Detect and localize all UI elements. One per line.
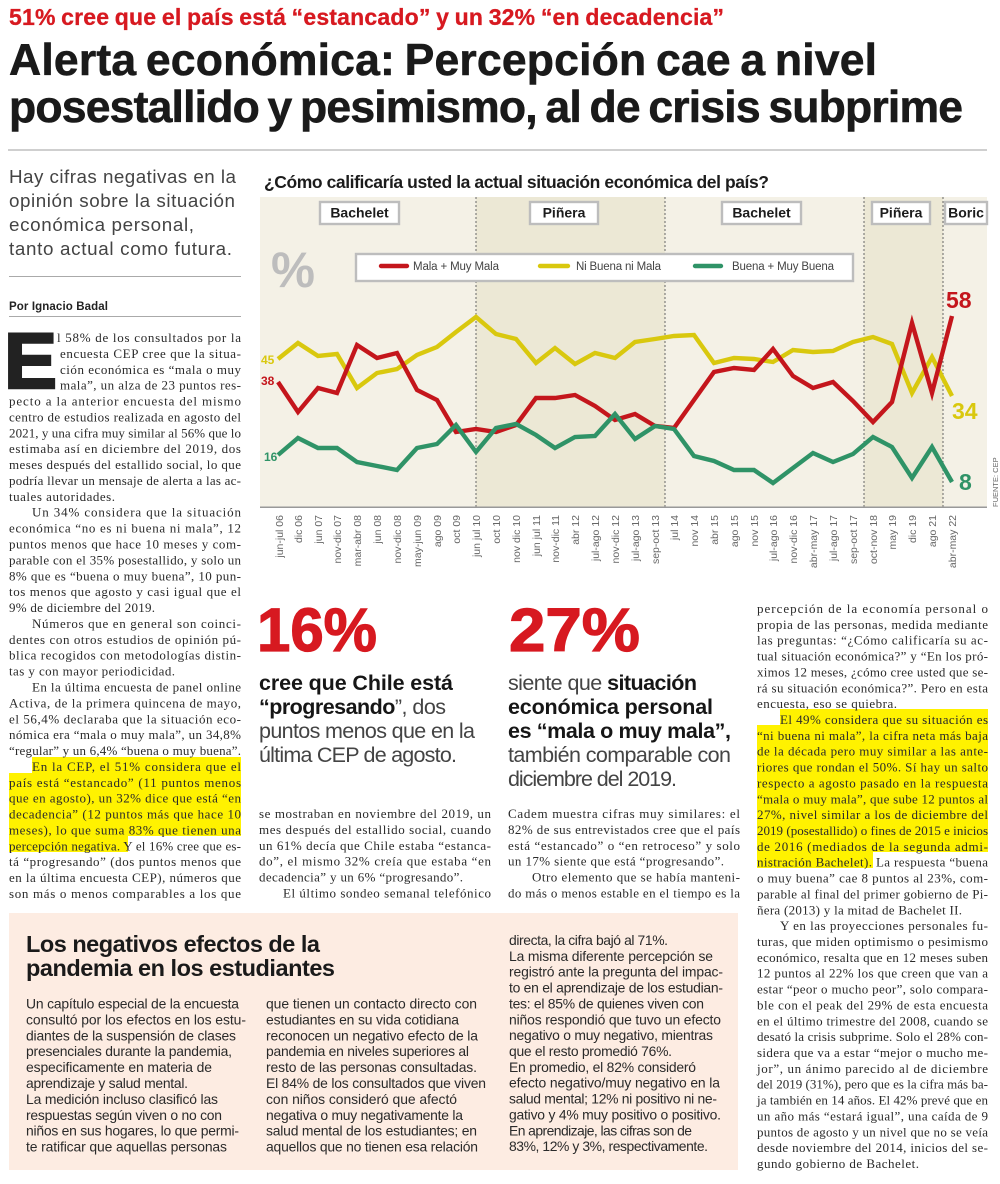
byline: Por Ignacio Badal bbox=[9, 301, 108, 313]
period label: Bachelet second term bbox=[722, 202, 801, 224]
x axis labels: nov-dic 11 bbox=[550, 515, 562, 563]
stat callout: 27%: es “mala o muy mala”, bbox=[508, 719, 731, 743]
article column four: ble con el peak del 29% de esta encuesta bbox=[757, 997, 988, 1012]
panel heading: pandemia en los estudiantes bbox=[26, 955, 335, 981]
panel text column three: salud mental; 12% ni positivo ni ne- bbox=[509, 1091, 717, 1107]
article column four: percepción de la economía personal o bbox=[757, 601, 988, 616]
x axis labels: ago 21 bbox=[927, 515, 939, 547]
x axis labels: jul-ago 13 bbox=[630, 515, 642, 562]
line chart bbox=[260, 197, 1000, 568]
x axis labels: sep-oct 17 bbox=[848, 515, 860, 564]
article column one: en la última encuesta CEP), números que bbox=[9, 870, 241, 885]
x axis labels: nov 14 bbox=[689, 515, 701, 547]
panel text column two: que tienen un contacto directo con bbox=[266, 996, 477, 1012]
x axis labels: oct 10 bbox=[491, 515, 503, 544]
article column four: o muy buena” cae 8 puntos al 23%, com- bbox=[757, 871, 988, 886]
article column one: 9% de diciembre del 2019. bbox=[9, 600, 155, 615]
period label: Bachelet second term: Bachelet bbox=[732, 204, 791, 220]
article column one: podría llevar un mensaje de alerta a las ac- bbox=[9, 473, 241, 488]
panel text column two: aquellos que no tienen esa relación bbox=[266, 1139, 478, 1155]
percent sign: % bbox=[271, 242, 315, 298]
article column four: 2019 (posestallido) o fines de 2015 e inicios bbox=[757, 823, 988, 838]
article column one bbox=[9, 330, 242, 901]
article column one: “regular” y un 6,4% “buena o muy buena”. bbox=[9, 743, 241, 758]
deck text: tanto actual como futura. bbox=[9, 238, 232, 259]
deck text: económica personal, bbox=[9, 214, 194, 235]
x axis labels: jul 14 bbox=[669, 515, 681, 541]
panel text column three: En promedio, el 82% consideró bbox=[509, 1059, 696, 1075]
article column two bbox=[259, 806, 492, 900]
article column four: sidera que va a estar “mejor o mucho me- bbox=[757, 1045, 988, 1060]
period label: Piñera bbox=[530, 202, 598, 224]
panel text column three: negativo o muy negativo, mientras bbox=[509, 1027, 713, 1043]
panel text column two: reconocen un negativo efecto de la bbox=[266, 1027, 478, 1043]
panel text column three: directa, la cifra bajó al 71%. bbox=[509, 932, 668, 948]
x axis labels: abr 12 bbox=[570, 515, 582, 545]
deck text: Hay cifras negativas en la bbox=[9, 166, 237, 187]
article column one: estimaba así en diciembre del 2019, dos bbox=[9, 441, 241, 456]
article column four: de la década pero muy similar a las ante- bbox=[757, 744, 988, 759]
start value labels: 38 bbox=[261, 374, 275, 388]
panel text column three: que el resto promedió 76%. bbox=[509, 1043, 672, 1059]
stat callout: 27% bbox=[508, 596, 731, 791]
article column four: ja también en 14 años. El 42% prevé que en bbox=[756, 1093, 988, 1108]
article column one: dentes con otros estudios de opinión pú- bbox=[9, 632, 241, 647]
article column one: 2021, y una cifra muy similar al 56% que lo bbox=[9, 425, 241, 440]
panel text column three: efecto negativo/muy negativo en la bbox=[509, 1075, 720, 1091]
panel: pandemic effects on students bbox=[9, 913, 738, 1170]
article column one: son más o menos comparables a los que bbox=[9, 886, 241, 901]
series: Buena + Muy Buena bbox=[278, 414, 952, 483]
article column one: meses), lo que suma 83% que tienen una bbox=[9, 822, 241, 838]
article column four: parable al final del primer gobierno de Pi- bbox=[757, 886, 988, 901]
legend: Mala + Muy Mala bbox=[413, 261, 500, 273]
article column three: Otro elemento que se había manteni- bbox=[532, 870, 740, 884]
article column four: puntos de agosto y un nivel que no se veía bbox=[757, 1124, 988, 1139]
article column four: un año más “estará igual”, una caída de 9 bbox=[757, 1108, 988, 1123]
panel text column one: aprendizaje y salud mental. bbox=[26, 1075, 188, 1091]
article column one: Un 34% considera que la situación bbox=[32, 505, 242, 520]
title: posestallido y pesimismo, al de crisis subprime bbox=[9, 83, 963, 132]
panel text column three: niños respondió que tuvo un efecto bbox=[509, 1011, 721, 1027]
panel text column three: La misma diferente percepción se bbox=[509, 948, 713, 964]
article column one: el 56,4% declaraba que la situación eco- bbox=[9, 711, 241, 726]
legend: Buena + Muy Buena bbox=[732, 261, 835, 273]
article column one: meses después del estallido social, lo que bbox=[9, 457, 241, 472]
x axis labels: abr 15 bbox=[709, 515, 721, 545]
article column four: riores que rondan el 50%. Sí hay un salto bbox=[757, 760, 988, 775]
article column three: un 17% siente que está “progresando”. bbox=[508, 854, 724, 869]
panel text column two: negativa o muy negativamente la bbox=[266, 1107, 463, 1123]
stat callout: 16%: 16% bbox=[257, 596, 377, 664]
period label: Piñera second term bbox=[872, 202, 930, 224]
x axis labels: abr-may 17 bbox=[808, 515, 820, 568]
article column one: tuales autoridades. bbox=[9, 489, 115, 504]
article column two: se mostraban en noviembre del 2019, un bbox=[259, 806, 492, 821]
panel text column two: El 84% de los consultados que viven bbox=[266, 1075, 486, 1091]
article column four: ñera (2013) y la mitad de Bachelet II. bbox=[757, 902, 962, 917]
series: Mala + Muy Mala bbox=[278, 316, 952, 432]
title bbox=[9, 36, 963, 132]
panel text column one: consultó por los efectos en los estu- bbox=[26, 1011, 246, 1027]
article column one: 8% que es “buena o muy buena”, 10 pun- bbox=[9, 568, 241, 583]
period label: Bachelet bbox=[320, 202, 399, 224]
stat callout: 16%: última CEP de agosto. bbox=[259, 743, 457, 767]
kicker: 51% cree que el país está “estancado” y un 32% “en decadencia” bbox=[9, 4, 724, 30]
panel text column three: tes: el 85% de quienes viven con bbox=[509, 995, 704, 1011]
panel text column three: En aprendizaje, las cifras son de bbox=[509, 1122, 692, 1138]
article column one: parable con el 35% posestallido, y solo un bbox=[9, 552, 242, 567]
x axis labels: nov 15 bbox=[749, 515, 761, 547]
panel text column two: estudiantes en su vida cotidiana bbox=[266, 1011, 459, 1027]
legend: Ni Buena ni Mala bbox=[576, 261, 662, 273]
period label: Piñera: Piñera bbox=[543, 204, 586, 220]
article column one: centro de estudios realizada en agosto del bbox=[9, 409, 241, 424]
article column four: nistración Bachelet). La respuesta “buena bbox=[757, 855, 988, 870]
start value labels bbox=[261, 353, 278, 464]
article column three: Cadem muestra cifras muy similares: el bbox=[508, 806, 740, 821]
deck text bbox=[9, 166, 237, 259]
chart background with government bands bbox=[260, 197, 987, 508]
period label: Boric: Boric bbox=[948, 204, 984, 220]
article column two: decadencia” y un 6% “progresando”. bbox=[259, 870, 463, 884]
article column four: turas, que miden optimismo o pesimismo bbox=[757, 934, 988, 949]
article column one: que en agosto), un 32% dice que está “en bbox=[9, 791, 241, 806]
period label: Bachelet: Bachelet bbox=[330, 204, 389, 220]
article column four: “mala o muy mala”, que sube 12 puntos al bbox=[757, 791, 988, 806]
article column four: estar “peor o mucho peor”, solo compara- bbox=[757, 982, 988, 997]
article column one: país está “estancado” (11 puntos menos bbox=[9, 775, 241, 790]
x axis labels: nov-dic 12 bbox=[610, 515, 622, 563]
x axis labels: jun 07 bbox=[313, 515, 325, 545]
stat callout: 16%: puntos menos que en la bbox=[259, 719, 475, 743]
article column four: en el último trimestre del 2008, cuando se bbox=[757, 1013, 988, 1028]
article column four: tual situación económica?” y “En los pró- bbox=[757, 649, 988, 664]
article column two: do”, el mismo 32% creía que estaba “en bbox=[259, 854, 492, 869]
panel text column two bbox=[266, 996, 486, 1155]
article column four: jor”, un ánimo parecido al de diciembre bbox=[756, 1061, 988, 1076]
stat callout: 16%: “progresando”, dos bbox=[259, 695, 446, 719]
series: Ni Buena ni Mala bbox=[278, 317, 952, 396]
stat callout: 27%: económica personal bbox=[508, 695, 713, 719]
highlight: article column four bbox=[757, 709, 988, 868]
panel text column one: La medición incluso clasificó las bbox=[26, 1091, 218, 1107]
x axis labels: oct 09 bbox=[451, 515, 463, 544]
start value labels: 45 bbox=[261, 353, 275, 367]
article column four: económico, resalta que en 12 meses suben bbox=[757, 950, 988, 965]
end value labels: 34 bbox=[952, 398, 978, 424]
article column one: En la última encuesta de panel online bbox=[32, 680, 241, 694]
article column two: El último sondeo semanal telefónico bbox=[283, 885, 491, 900]
x axis labels: sep-oct 13 bbox=[650, 515, 662, 564]
x axis labels: dic 19 bbox=[907, 515, 919, 543]
end value labels: 8 bbox=[959, 469, 972, 495]
x axis labels: may 19 bbox=[887, 515, 899, 549]
panel text column one: especificamente en materia de bbox=[26, 1059, 212, 1075]
article column four: rá su situación económica?”. Pero en esta bbox=[757, 680, 988, 695]
panel text column one: respuestas según viven o no con bbox=[26, 1107, 222, 1123]
panel text column one: Un capítulo especial de la encuesta bbox=[26, 996, 239, 1012]
period label: Boric bbox=[945, 202, 987, 224]
article column one: blica recogidos con metodologías distin- bbox=[9, 648, 241, 663]
panel text column one: niños en sus hogares, lo que permi- bbox=[26, 1123, 239, 1139]
stat callout: 27%: diciembre del 2019. bbox=[508, 767, 677, 791]
article column four: 12 puntos al 22% los que creen que van a bbox=[757, 966, 988, 981]
panel text column one bbox=[26, 996, 246, 1155]
panel text column one: presenciales durante la pandemia, bbox=[26, 1043, 232, 1059]
panel text column two: con niños consideró que afectó bbox=[266, 1091, 457, 1107]
x axis labels: ago 15 bbox=[729, 515, 741, 547]
x axis labels: jul-ago 17 bbox=[828, 515, 840, 562]
chart title: ¿Cómo calificaría usted la actual situación económica del país? bbox=[264, 172, 769, 192]
source note: FUENTE: CEP bbox=[991, 457, 1000, 507]
article column two: un 61% decía que Chile estaba “estanca- bbox=[259, 838, 491, 853]
article column four: El 49% considera que su situación es bbox=[780, 712, 988, 727]
panel text column two: resto de las personas consultadas. bbox=[266, 1059, 477, 1075]
article column four: propia de las personas, medida mediante bbox=[757, 617, 988, 632]
stat callout: 27%: siente que situación bbox=[508, 671, 697, 695]
article column four: del 2019 (31%), pero que es la cifra más ba- bbox=[757, 1077, 988, 1092]
x axis labels: jun 08 bbox=[372, 515, 384, 545]
article column three: está “estancado” o “en retroceso” y solo bbox=[508, 838, 740, 853]
article column one: puntos menos que hace 10 meses y com- bbox=[9, 536, 241, 552]
article column four: desde noviembre del 2014, inicios del se- bbox=[757, 1140, 988, 1155]
x axis labels: nov dic 10 bbox=[511, 515, 523, 563]
x axis labels: jul-ago 12 bbox=[590, 515, 602, 562]
panel text column three bbox=[509, 932, 723, 1154]
x axis labels bbox=[274, 515, 959, 568]
panel heading bbox=[26, 931, 335, 981]
stat callout: 27%: 27% bbox=[509, 596, 640, 664]
article column one: económica “no es ni buena ni mala”, 12 bbox=[9, 521, 241, 536]
article column four: respecto a agosto pasado en la respuesta bbox=[757, 775, 988, 790]
x axis labels: abr-may 22 bbox=[947, 515, 959, 568]
article column four: ximos 12 meses, ¿cómo cree usted que se- bbox=[757, 664, 988, 679]
article column one: ción económica es “mala o muy bbox=[60, 362, 242, 377]
x axis labels: nov-dic 08 bbox=[392, 515, 404, 563]
drop cap: E bbox=[4, 316, 57, 405]
article column one: tá “progresando” (dos puntos menos que bbox=[9, 854, 241, 869]
article column four bbox=[756, 601, 988, 1171]
article column four: “ni buena ni mala”, la cifra neta más baja bbox=[757, 728, 988, 743]
article column four: gundo gobierno de Bachelet. bbox=[757, 1156, 919, 1171]
period label: Piñera second term: Piñera bbox=[880, 204, 923, 220]
stat callout: 27%: también comparable con bbox=[508, 743, 731, 767]
highlight: article column one bbox=[9, 757, 241, 852]
article column three: do más o menos estable en el tiempo es la bbox=[508, 885, 740, 900]
panel text column three: gativo y 4% muy positivo o positivo. bbox=[509, 1106, 721, 1122]
x axis labels: oct-nov 18 bbox=[868, 515, 880, 564]
article column one: decadencia” (12 puntos más que hace 10 bbox=[9, 807, 241, 822]
x axis labels: jun jul 10 bbox=[471, 515, 483, 558]
end value labels: 58 bbox=[946, 287, 972, 313]
article column three: 82% de sus entrevistados cree que el país bbox=[508, 822, 740, 837]
article column one: percepción negativa. Y el 16% cree que es- bbox=[9, 838, 241, 853]
article column three bbox=[508, 806, 740, 900]
article column one: l 58% de los consultados por la bbox=[57, 330, 241, 345]
article column one: Números que en general son coinci- bbox=[32, 616, 241, 631]
article column four: encuesta, eso se quiebra. bbox=[757, 696, 897, 711]
x axis labels: mar-abr 08 bbox=[352, 515, 364, 566]
stat callout: 16%: cree que Chile está bbox=[259, 671, 454, 695]
panel text column three: to en el aprendizaje de los estudian- bbox=[509, 980, 723, 996]
x axis labels: jun jul 11 bbox=[531, 515, 543, 557]
article column four: de 2016 (mediados de la segunda admi- bbox=[757, 839, 988, 854]
deck text: opinión sobre la situación bbox=[9, 190, 235, 211]
article column four: desató la crisis subprime. Solo el 28% con- bbox=[757, 1029, 988, 1044]
article column four: 27%, nivel similar a los de diciembre del bbox=[757, 807, 988, 822]
end value labels bbox=[946, 287, 978, 495]
panel heading: Los negativos efectos de la bbox=[26, 931, 321, 957]
legend bbox=[356, 254, 853, 281]
article column one: pecto a la anterior encuesta del mismo bbox=[9, 394, 241, 408]
x axis labels: ago 09 bbox=[432, 515, 444, 547]
stat callout: 16% bbox=[257, 596, 475, 767]
article column one: nómica era “mala o muy mala”, un 34,8% bbox=[9, 727, 241, 742]
panel text column three: registró ante la pregunta del impac- bbox=[509, 964, 723, 980]
x axis labels: jul-ago 16 bbox=[768, 515, 780, 562]
article column one: Activa, de la primera quincena de mayo, bbox=[9, 695, 241, 710]
article column one: mala”, un alza de 23 puntos res- bbox=[60, 378, 241, 393]
start value labels: 16 bbox=[264, 450, 278, 464]
x axis labels: nov-dic 07 bbox=[332, 515, 344, 563]
article column two: mes después del estallido social, cuando bbox=[259, 822, 491, 837]
article column one: En la CEP, el 51% considera que el bbox=[32, 759, 241, 774]
title: Alerta económica: Percepción cae a nivel bbox=[9, 36, 877, 85]
article column four: Y en las proyecciones personales fu- bbox=[780, 918, 988, 933]
panel text column two: salud mental de los estudiantes; en bbox=[266, 1123, 477, 1139]
article column one: encuesta CEP cree que la situa- bbox=[60, 346, 241, 361]
panel text column one: diantes de la suspensión de clases bbox=[26, 1027, 236, 1043]
article column four: las preguntas: “¿Cómo calificaría su ac- bbox=[757, 633, 988, 648]
x axis labels: dic 06 bbox=[293, 515, 305, 543]
x axis labels: nov-dic 16 bbox=[788, 515, 800, 563]
article column one: tas y con mayor periodicidad. bbox=[9, 664, 175, 679]
article column one: tos menos que agosto y casi igual que el bbox=[9, 584, 241, 599]
panel text column three: 83%, 12% y 3%, respectivamente. bbox=[509, 1138, 708, 1154]
x axis labels: may-jun 09 bbox=[412, 515, 424, 567]
panel text column one: te ratificar que aquellas personas bbox=[26, 1139, 227, 1155]
panel text column two: pandemia en niveles superiores al bbox=[266, 1043, 469, 1059]
x axis labels: jun-jul 06 bbox=[274, 515, 286, 559]
